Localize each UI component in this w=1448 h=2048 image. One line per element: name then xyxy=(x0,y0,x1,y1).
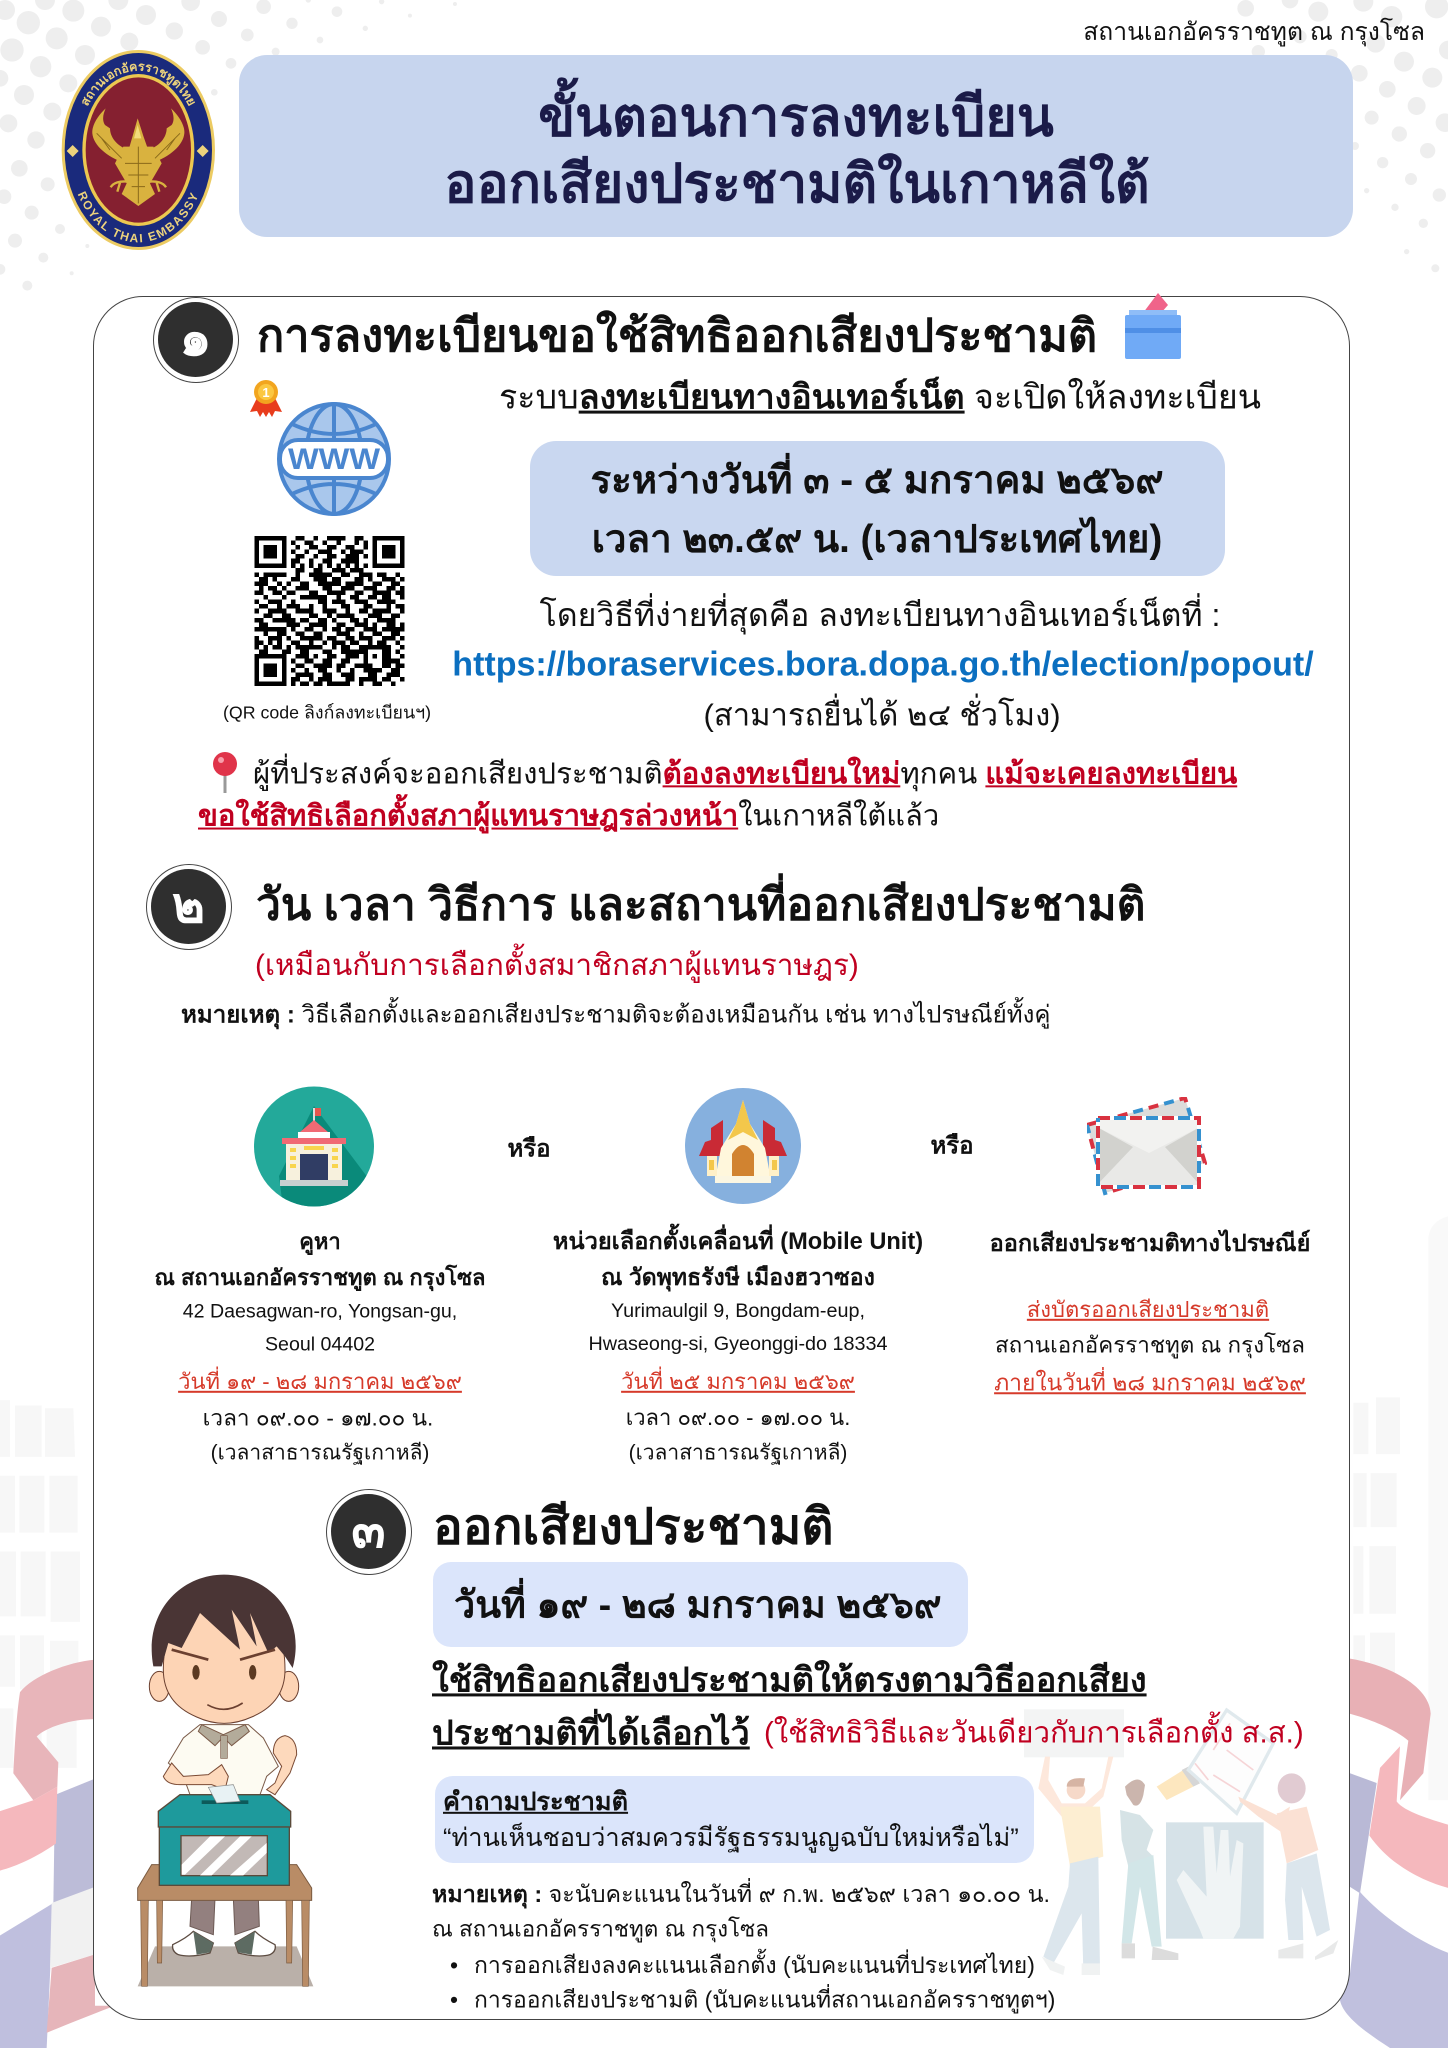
voting instruction line 2: ประชามติที่ได้เลือกไว้ xyxy=(432,1714,750,1752)
hours: เวลา ๐๙.๐๐ - ๑๗.๐๐ น. xyxy=(626,1405,850,1430)
voting instruction red note: (ใช้สิทธิวิธีและวันเดียวกับการเลือกตั้ง ส.ส.) xyxy=(764,1716,1304,1749)
title line 2: ออกเสียงประชามติในเกาหลีใต้ xyxy=(444,155,1150,214)
venue name: หน่วยเลือกตั้งเคลื่อนที่ (Mobile Unit) xyxy=(553,1229,923,1255)
timezone: (เวลาสาธารณรัฐเกาหลี) xyxy=(211,1441,429,1464)
icon: www globe: WWW xyxy=(288,443,381,476)
step 3 number xyxy=(326,1489,412,1575)
bullet: referendum count: การออกเสียงประชามติ (นับคะแนนที่สถานเอกอัครราชทูตฯ) xyxy=(474,1986,1055,2012)
step 1 number xyxy=(153,297,239,383)
bullet: referendum count: • xyxy=(450,1986,458,2012)
venue location: ณ วัดพุทธรังษี เมืองฮวาซอง xyxy=(601,1264,875,1290)
icon: airmail envelopes xyxy=(1087,1097,1207,1196)
"or" label 1: หรือ xyxy=(507,1136,551,1163)
step 3 heading: ออกเสียงประชามติ xyxy=(433,1499,834,1554)
venue name: คูหา xyxy=(299,1229,341,1254)
column: embassy in-person voting xyxy=(154,1229,486,1465)
step 2 red subheading: (เหมือนกับการเลือกตั้งสมาชิกสภาผู้แทนราษฎร) xyxy=(255,949,859,982)
step 2 note: หมายเหตุ : วิธีเลือกตั้งและออกเสียงประชามติจะต้องเหมือนกัน เช่น ทางไปรษณีย์ทั้งคู่ xyxy=(181,1002,1051,1029)
column: postal voting xyxy=(990,1229,1310,1395)
counting note line 1: หมายเหตุ : จะนับคะแนนในวันที่ ๙ ก.พ. ๒๕๖๙ เวลา ๑๐.๐๐ น. xyxy=(432,1881,1050,1907)
send ballot: ส่งบัตรออกเสียงประชามติ xyxy=(1027,1297,1269,1322)
step 2 number: ๒ xyxy=(172,877,205,933)
timezone: (เวลาสาธารณรัฐเกาหลี) xyxy=(629,1441,847,1464)
hours: เวลา ๐๙.๐๐ - ๑๗.๐๐ น. xyxy=(203,1405,433,1430)
column: mobile unit voting xyxy=(553,1224,923,1465)
icon: ballot box xyxy=(1125,293,1181,359)
step 1 number: ๑ xyxy=(180,310,211,366)
illustration: boy casting a ballot xyxy=(137,1574,314,1987)
icon: map pin xyxy=(213,752,237,793)
icon: Thai temple xyxy=(685,1088,801,1204)
registration dates: ระหว่างวันที่ ๓ - ๕ มกราคม ๒๕๖๙ xyxy=(590,459,1164,502)
registration time: เวลา ๒๓.๕๙ น. (เวลาประเทศไทย) xyxy=(592,518,1162,561)
address line 1: Yurimaulgil 9, Bongdam-eup, xyxy=(611,1300,865,1322)
counting note line 2: ณ สถานเอกอัครราชทูต ณ กรุงโซล xyxy=(432,1917,769,1942)
step 2 number xyxy=(146,864,232,950)
referendum question box xyxy=(435,1776,1034,1863)
24 hour note: (สามารถยื่นได้ ๒๔ ชั่วโมง) xyxy=(703,697,1061,732)
re-registration note line 1: ผู้ที่ประสงค์จะออกเสียงประชามติต้องลงทะเบียนใหม่ทุกคน แม้จะเคยลงทะเบียน xyxy=(253,757,1237,790)
title line 1: ขั้นตอนการลงทะเบียน xyxy=(538,88,1054,148)
icon: medal xyxy=(250,380,282,417)
QR code xyxy=(254,536,404,686)
"or" label 2: หรือ xyxy=(930,1133,974,1160)
bullet: election count: การออกเสียงลงคะแนนเลือกตั้ง (นับคะแนนที่ประเทศไทย) xyxy=(474,1952,1035,1978)
icon: medal: 1 xyxy=(262,385,270,400)
address line 2: Seoul 04402 xyxy=(265,1333,375,1355)
question label: คำถามประชามติ xyxy=(443,1788,628,1816)
registration url: https://boraservices.bora.dopa.go.th/election/popout/ xyxy=(452,646,1314,684)
date callout xyxy=(530,441,1225,576)
dates: วันที่ ๒๕ มกราคม ๒๕๖๙ xyxy=(621,1369,855,1394)
voting instruction line 1: ใช้สิทธิออกเสียงประชามติให้ตรงตามวิธีออกเสียง xyxy=(432,1661,1147,1699)
dates: วันที่ ๑๙ - ๒๘ มกราคม ๒๕๖๙ xyxy=(178,1369,462,1394)
panel: step 1 registration xyxy=(153,293,1314,834)
panel: step 2 voting methods xyxy=(146,864,1310,1465)
step 3 number: ๓ xyxy=(351,1502,386,1558)
registration system text: ระบบลงทะเบียนทางอินเทอร์เน็ต จะเปิดให้ลงทะเบียน xyxy=(499,379,1261,417)
deadline: ภายในวันที่ ๒๘ มกราคม ๒๕๖๙ xyxy=(994,1369,1306,1395)
agency name: สถานเอกอัครราชทูต ณ กรุงโซล xyxy=(1083,19,1425,46)
illustration: faint voters with megaphone and ballot xyxy=(1024,1708,1338,1975)
QR code caption: (QR code ลิงก์ลงทะเบียนฯ) xyxy=(223,702,431,722)
logo: Royal Thai Embassy seal: ROYAL THAI EMBASSY xyxy=(78,191,198,242)
step 2 heading: วัน เวลา วิธีการ และสถานที่ออกเสียงประชามติ xyxy=(256,880,1145,929)
method name: ออกเสียงประชามติทางไปรษณีย์ xyxy=(990,1230,1310,1256)
address line 1: 42 Daesagwan-ro, Yongsan-gu, xyxy=(183,1300,457,1322)
panel: step 3 casting the vote xyxy=(137,1489,1338,2014)
destination: สถานเอกอัครราชทูต ณ กรุงโซล xyxy=(995,1333,1305,1358)
venue location: ณ สถานเอกอัครราชทูต ณ กรุงโซล xyxy=(154,1265,486,1290)
voting dates: วันที่ ๑๙ - ๒๘ มกราคม ๒๕๖๙ xyxy=(454,1584,942,1626)
logo: Royal Thai Embassy seal xyxy=(62,50,215,250)
voting dates callout xyxy=(433,1562,968,1647)
address line 2: Hwaseong-si, Gyeonggi-do 18334 xyxy=(588,1333,888,1355)
logo: Royal Thai Embassy seal: สถานเอกอัครราชทูตไทย xyxy=(82,62,195,106)
step 1 heading: การลงทะเบียนขอใช้สิทธิออกเสียงประชามติ xyxy=(257,310,1097,361)
question text: “ท่านเห็นชอบว่าสมควรมีรัฐธรรมนูญฉบับใหม่หรือไม่” xyxy=(443,1824,1019,1852)
title banner xyxy=(239,55,1353,237)
easiest method text: โดยวิธีที่ง่ายที่สุดคือ ลงทะเบียนทางอินเทอร์เน็ตที่ : xyxy=(540,597,1220,633)
icon: embassy building xyxy=(254,1086,374,1206)
re-registration note line 2: ขอใช้สิทธิเลือกตั้งสภาผู้แทนราษฎรล่วงหน้าในเกาหลีใต้แล้ว xyxy=(198,801,939,833)
icon: www globe xyxy=(277,402,391,516)
bullet: election count: • xyxy=(450,1952,458,1978)
main white card xyxy=(93,296,1350,2020)
